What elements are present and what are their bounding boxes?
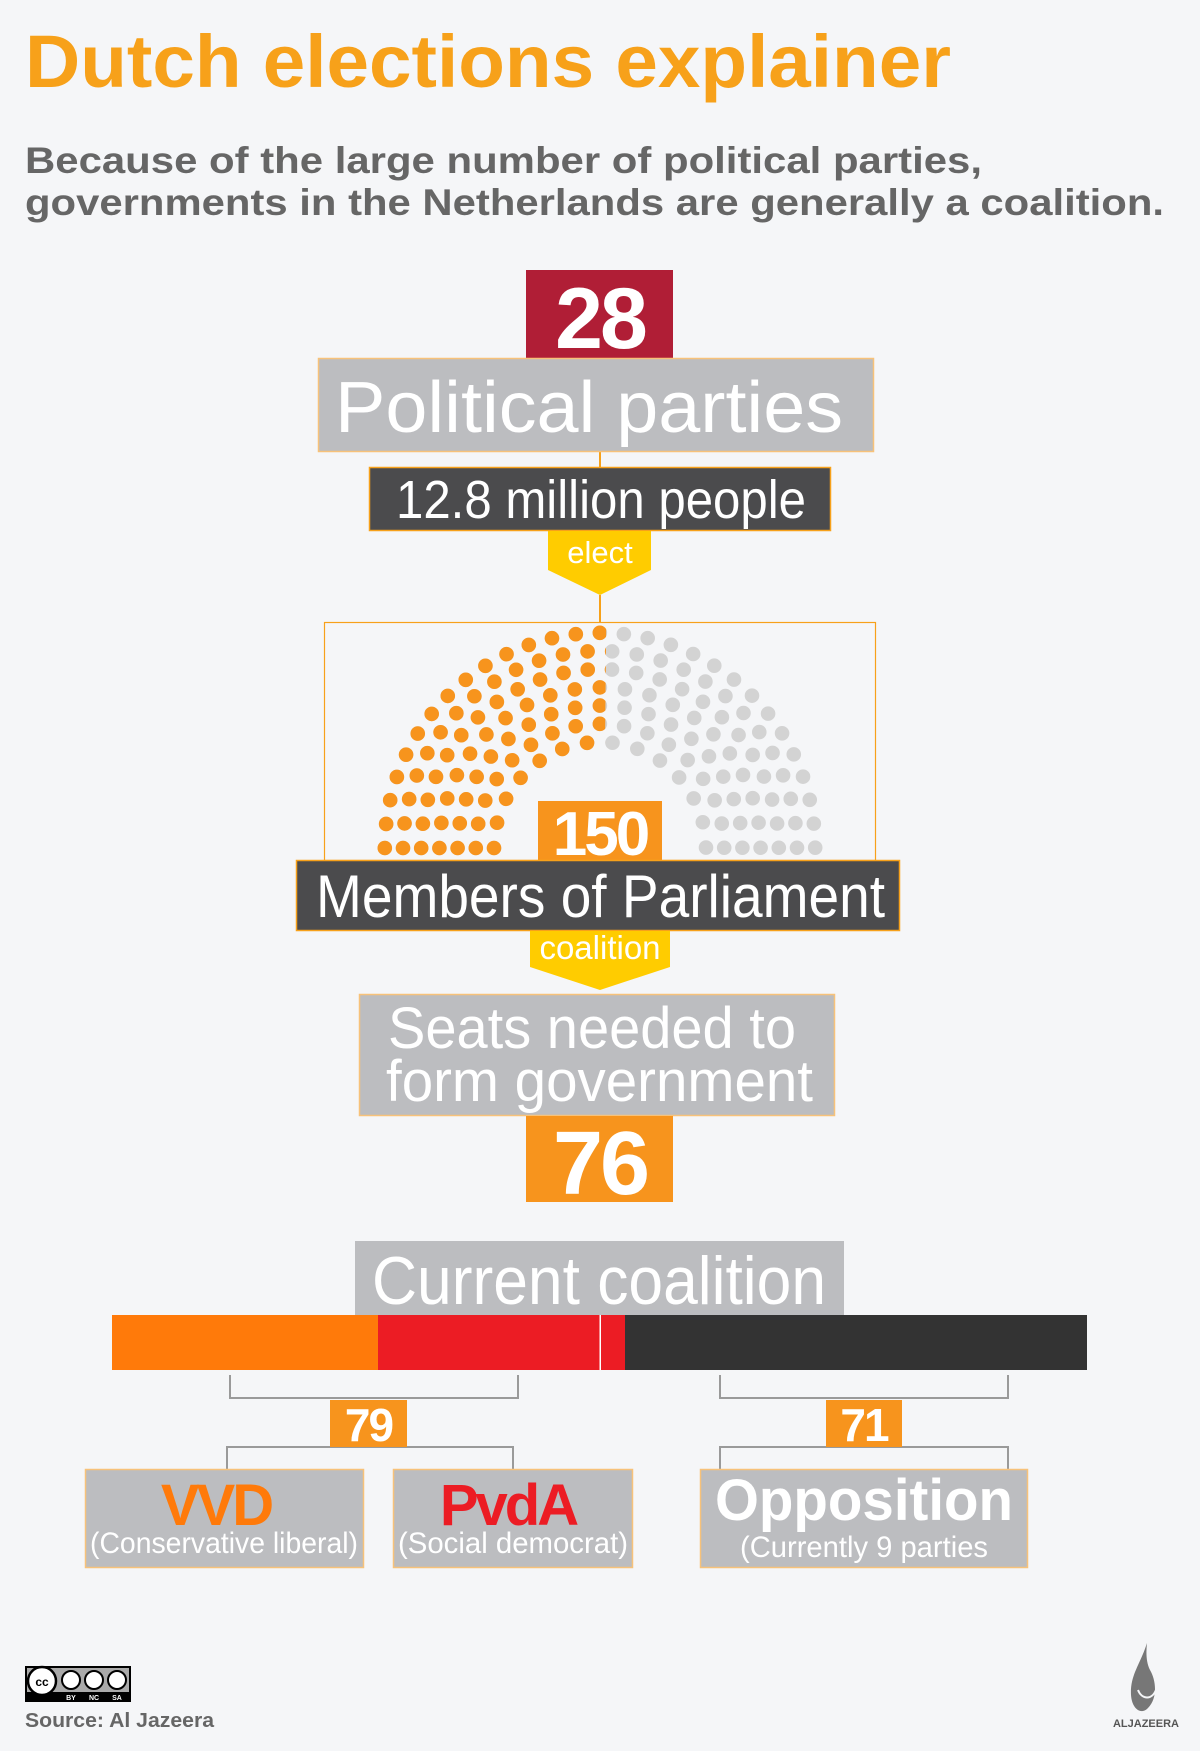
subtitle xyxy=(25,140,1164,223)
box: 71: 71 xyxy=(840,1399,889,1451)
subtitle: governments in the Netherlands are generally a coalition. xyxy=(25,182,1164,223)
brackets xyxy=(227,1375,1008,1469)
arrow: coalition: coalition xyxy=(539,929,661,966)
subtitle: Because of the large number of political parties, xyxy=(25,140,982,181)
box: PvdA xyxy=(394,1470,632,1568)
icon: creative commons badge xyxy=(25,1666,131,1702)
box: 12.8 million people: 12.8 million people xyxy=(396,470,806,530)
box: seats needed: form government xyxy=(386,1049,813,1114)
box: VVD xyxy=(86,1470,364,1568)
box: political parties: Political parties xyxy=(335,368,843,448)
box: 28 xyxy=(526,270,673,367)
icon: al jazeera logo xyxy=(1113,1643,1179,1730)
icon: creative commons badge: SA xyxy=(112,1695,122,1702)
icon: creative commons badge: cc xyxy=(35,1675,49,1689)
box: 71 xyxy=(826,1399,902,1451)
box: opposition: Opposition xyxy=(715,1468,1013,1533)
box: seats needed: Seats needed to xyxy=(388,996,796,1061)
box: 79 xyxy=(330,1399,407,1451)
box: 76 xyxy=(526,1114,673,1214)
panel: hemicycle xyxy=(324,622,876,860)
box: members of parliament: Members of Parliament xyxy=(316,863,885,930)
arrow: elect: elect xyxy=(567,535,633,570)
box: 28: 28 xyxy=(555,271,646,367)
heading: current coalition: Current coalition xyxy=(372,1243,826,1319)
box: opposition xyxy=(700,1468,1028,1568)
connector lines xyxy=(599,452,601,622)
icon: al jazeera logo: ALJAZEERA xyxy=(1113,1718,1179,1730)
box: seats needed xyxy=(360,994,834,1116)
arrow: coalition xyxy=(530,929,670,990)
box: 79: 79 xyxy=(345,1399,392,1451)
box: VVD: VVD xyxy=(161,1473,272,1538)
arrow: elect xyxy=(548,531,651,595)
box: opposition: (Currently 9 parties xyxy=(740,1531,988,1564)
box: 150: 150 xyxy=(553,800,648,869)
bar chart: seat split xyxy=(112,1315,1087,1370)
icon: creative commons badge: BY xyxy=(66,1695,76,1702)
box: VVD: (Conservative liberal) xyxy=(90,1527,358,1560)
box: PvdA: PvdA xyxy=(440,1473,578,1538)
source text: Source: Al Jazeera xyxy=(25,1710,215,1732)
box: 76: 76 xyxy=(553,1114,647,1214)
title: Dutch elections explainer xyxy=(25,20,951,103)
box: PvdA: (Social democrat) xyxy=(398,1527,628,1560)
icon: creative commons badge: NC xyxy=(89,1695,99,1702)
